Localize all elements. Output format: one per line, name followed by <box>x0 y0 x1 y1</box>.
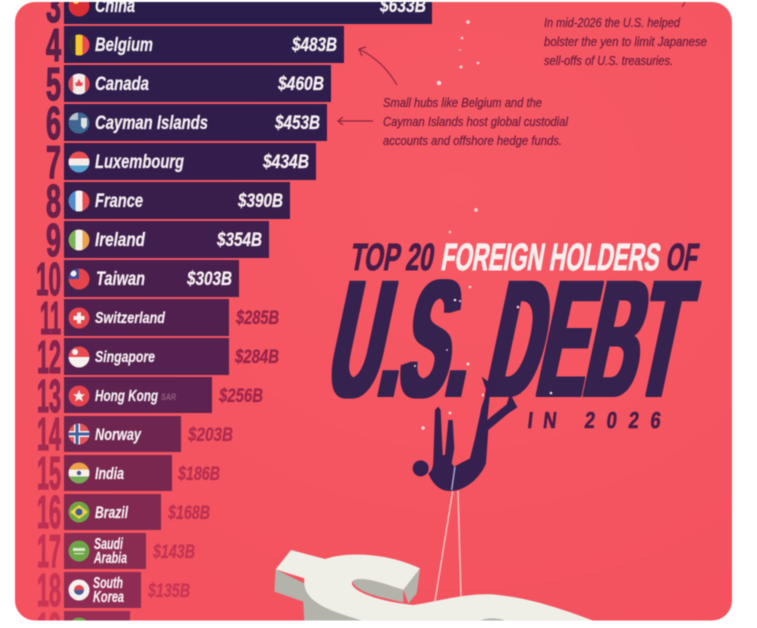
title: in 2026: IN <box>526 408 558 434</box>
callout: small hubs note: Cayman Islands host global custodial <box>383 115 569 129</box>
row 4 Belgium: Belgium <box>95 35 153 56</box>
row 14 Norway <box>38 415 233 453</box>
row 15 India: 15 <box>37 447 61 499</box>
row 18 South Korea: South <box>93 575 123 592</box>
row 13 Hong Kong: 13 <box>37 370 61 422</box>
callout: Japan yen note <box>544 16 707 68</box>
illustration: falling figure <box>413 377 517 491</box>
row 18 South Korea: 18 <box>37 564 61 616</box>
row 5 Canada: $460B <box>277 74 324 95</box>
row 11 Switzerland: $285B <box>235 308 279 329</box>
row 9 Ireland: $354B <box>216 230 262 251</box>
row 11 Switzerland: Switzerland <box>95 310 166 327</box>
title: U.S. DEBT: U.S. <box>316 246 495 432</box>
row 12 Singapore: 12 <box>37 331 61 383</box>
row 9 Ireland: Ireland <box>95 230 145 251</box>
row 13 Hong Kong: $256B <box>218 386 263 407</box>
row 10 Taiwan: Taiwan <box>96 269 145 290</box>
row 12 Singapore: Singapore <box>95 349 155 366</box>
row 8 France: France <box>95 191 143 212</box>
row 6 Cayman Islands: 6 <box>46 97 61 149</box>
row 9 Ireland <box>46 220 270 259</box>
row 4 Belgium: 4 <box>46 19 61 71</box>
callout: small hubs note <box>383 96 569 148</box>
row 4 Belgium: $483B <box>291 35 337 56</box>
row 14 Norway: Norway <box>95 425 142 444</box>
row 7 Luxembourg: 7 <box>46 136 61 188</box>
row 17 Saudi Arabia: Arabia <box>93 550 127 567</box>
row 7 Luxembourg: $434B <box>262 152 309 173</box>
row 4 Belgium <box>45 25 345 64</box>
row 8 France <box>46 181 291 220</box>
row 12 Singapore: $284B <box>234 347 279 368</box>
row 16 Brazil: Brazil <box>95 503 129 522</box>
row 11 Switzerland <box>40 298 280 337</box>
row 6 Cayman Islands: Cayman Islands <box>95 113 208 134</box>
row 6 Cayman Islands <box>46 103 328 142</box>
row 7 Luxembourg: Luxembourg <box>95 152 184 173</box>
row 13 Hong Kong: Hong Kong <box>95 388 158 405</box>
row 15 India <box>38 454 220 492</box>
callout: small hubs note: Small hubs like Belgium and the <box>383 96 542 110</box>
row 8 France: $390B <box>237 191 283 212</box>
callout: small hubs note: accounts and offshore hedge funds. <box>383 134 562 148</box>
row 17 Saudi Arabia: 17 <box>37 525 61 577</box>
row 10 Taiwan: 10 <box>36 253 61 305</box>
row 12 Singapore <box>38 337 279 376</box>
arrow: straight to Cayman Islands <box>338 117 373 125</box>
title: top line <box>352 242 701 272</box>
row 5 Canada: 5 <box>46 58 61 110</box>
row 10 Taiwan <box>36 259 240 298</box>
row 7 Luxembourg <box>46 142 317 181</box>
title: top line: TOP 20 <box>347 236 438 279</box>
title: in 2026 <box>527 410 662 430</box>
bar chart: foreign holders ranking <box>36 0 432 628</box>
row 17 Saudi Arabia: $143B <box>152 542 195 563</box>
row 16 Brazil <box>38 493 210 531</box>
row 15 India: India <box>95 464 124 483</box>
callout: Japan yen note: bolster the yen to limit Japanese <box>544 35 707 49</box>
row 5 Canada: Canada <box>95 74 149 95</box>
row 14 Norway: 14 <box>37 408 61 460</box>
illustration: dollar sign <box>274 550 593 623</box>
title: top line: OF <box>663 236 702 279</box>
row 5 Canada <box>46 64 332 103</box>
row 3 China <box>46 1 433 25</box>
arrow: curved to Belgium <box>359 47 397 85</box>
row 13 Hong Kong: SAR <box>161 392 176 402</box>
row 19 cropped bar <box>38 610 130 622</box>
row 18 South Korea: Korea <box>93 589 124 606</box>
row 8 France: 8 <box>46 175 61 227</box>
row 18 South Korea <box>38 572 190 608</box>
title: in 2026: 2026 <box>583 408 662 434</box>
row 15 India: $186B <box>177 464 220 485</box>
illustration: strings <box>435 491 461 601</box>
callout: Japan yen note: In mid-2026 the U.S. helped <box>544 16 681 30</box>
row 16 Brazil: 16 <box>37 486 61 538</box>
row 10 Taiwan: $303B <box>186 269 232 290</box>
row 14 Norway: $203B <box>187 425 233 446</box>
row 11 Switzerland: 11 <box>40 292 61 344</box>
sparkle dots <box>414 20 552 430</box>
row 18 South Korea: $135B <box>147 581 190 602</box>
row 13 Hong Kong <box>38 376 263 414</box>
row 16 Brazil: $168B <box>167 503 210 524</box>
row 17 Saudi Arabia <box>38 532 195 570</box>
callout: Japan yen note: sell-offs of U.S. treasuries. <box>544 54 673 68</box>
row 6 Cayman Islands: $453B <box>274 113 320 134</box>
arrow: tip near yen note <box>682 0 686 7</box>
title: U.S. DEBT <box>330 278 702 400</box>
row 9 Ireland: 9 <box>46 214 61 266</box>
row 17 Saudi Arabia: Saudi <box>94 536 123 553</box>
